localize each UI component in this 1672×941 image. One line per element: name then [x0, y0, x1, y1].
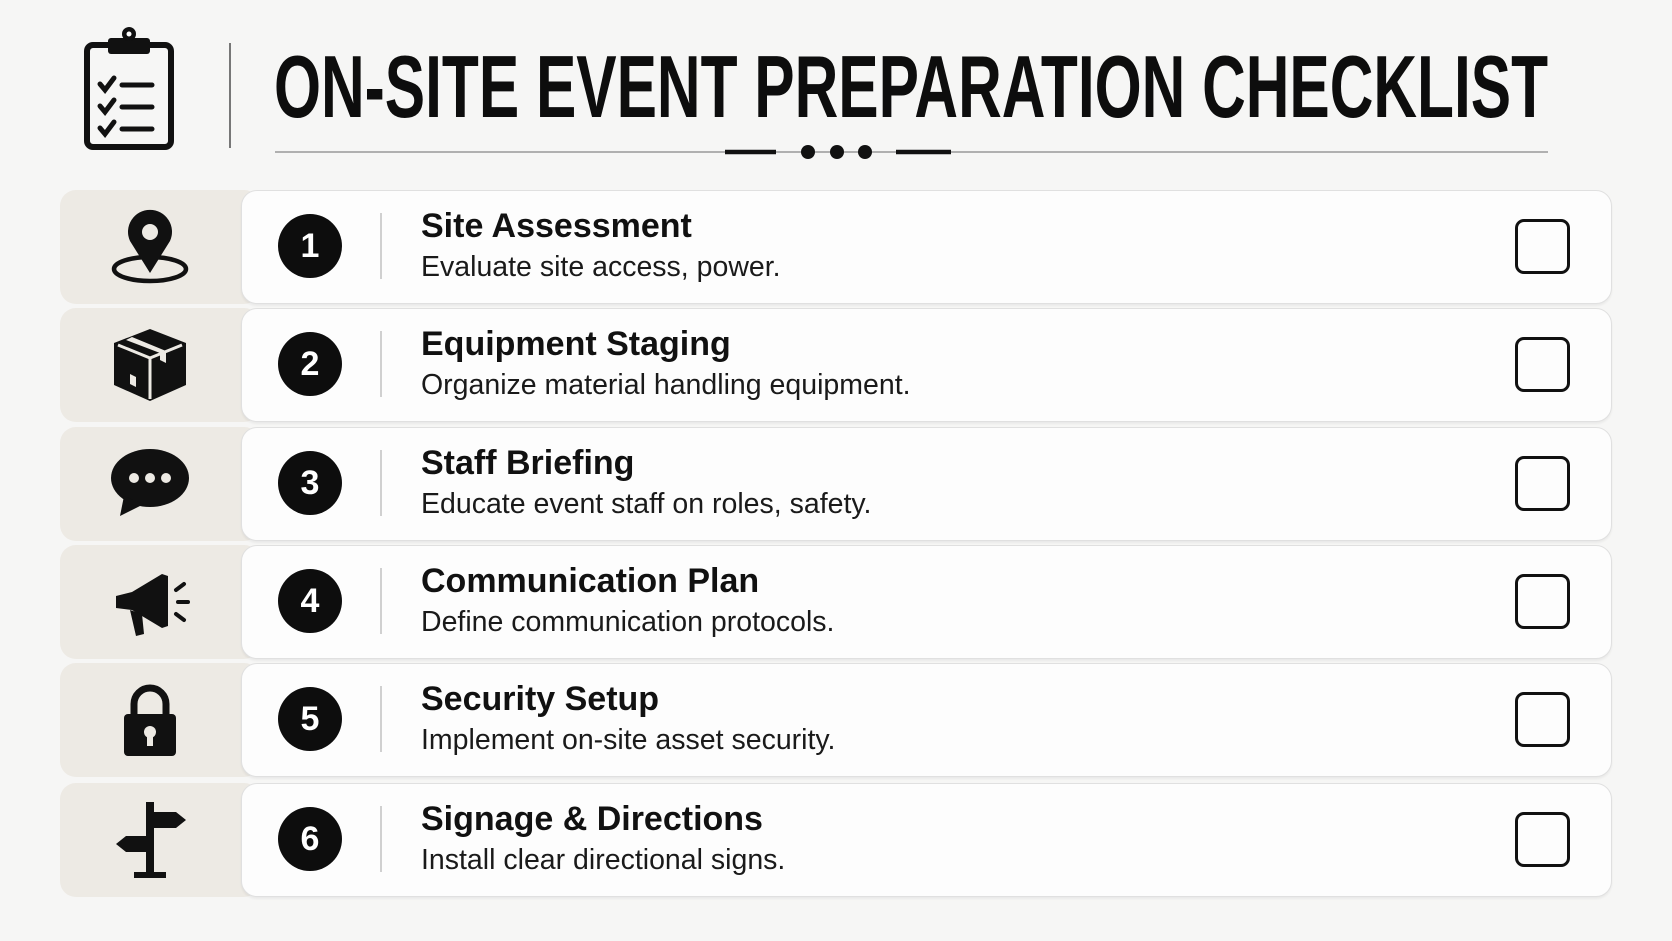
- icon: location pin: [112, 210, 188, 284]
- text: security setup: [421, 680, 835, 756]
- icon: box: [114, 329, 186, 401]
- icon: padlock: [124, 684, 176, 756]
- icon: speech bubble: [111, 449, 189, 516]
- vertical divider: [229, 43, 231, 148]
- number badge 1: 1: [301, 227, 319, 265]
- number badge 3: [278, 451, 342, 515]
- row 5: security setup: [60, 663, 1612, 778]
- row 3: staff briefing: [60, 427, 1612, 542]
- number badge 5: 5: [301, 700, 319, 738]
- checkbox: [1515, 692, 1570, 747]
- row 2: equipment staging: [60, 308, 1612, 424]
- number badge 1: [278, 214, 342, 278]
- text: site assessment: Evaluate site access, power.: [421, 251, 781, 283]
- number badge 5: [278, 687, 342, 751]
- icon: megaphone: [116, 574, 190, 636]
- row 4: communication plan: [60, 545, 1612, 660]
- number badge 4: [278, 569, 342, 633]
- title underline ornament: [275, 145, 1548, 159]
- row 1: site assessment: [60, 190, 1612, 306]
- checkbox: [1515, 812, 1570, 867]
- text: security setup: Implement on-site asset security.: [421, 724, 835, 756]
- text: staff briefing: [421, 444, 871, 520]
- text: signage & directions: Install clear directional signs.: [421, 844, 785, 876]
- checkbox: [1515, 219, 1570, 274]
- icon: clipboard: [84, 27, 174, 150]
- number badge 2: [278, 332, 342, 396]
- text: communication plan: Define communication protocols.: [421, 606, 834, 638]
- text: communication plan: Communication Plan: [421, 562, 759, 600]
- number badge 3: 3: [301, 464, 319, 502]
- text: equipment staging: [421, 325, 911, 401]
- checkbox: [1515, 337, 1570, 392]
- text: security setup: Security Setup: [421, 680, 659, 718]
- checkbox: [1515, 574, 1570, 629]
- number badge 4: 4: [301, 582, 319, 620]
- text: equipment staging: Equipment Staging: [421, 325, 731, 363]
- text: communication plan: [421, 562, 834, 638]
- number badge 6: 6: [301, 820, 319, 858]
- icon: signpost: [116, 802, 186, 878]
- text: staff briefing: Staff Briefing: [421, 444, 634, 482]
- text: signage & directions: Signage & Directions: [421, 800, 763, 838]
- text: equipment staging: Organize material handling equipment.: [421, 369, 911, 401]
- number badge 2: 2: [301, 345, 319, 383]
- text: signage & directions: [421, 800, 785, 876]
- row 6: signage & directions: [60, 783, 1612, 898]
- checkbox: [1515, 456, 1570, 511]
- text: staff briefing: Educate event staff on roles, safety.: [421, 488, 871, 520]
- number badge 6: [278, 807, 342, 871]
- text: site assessment: Site Assessment: [421, 207, 692, 245]
- text: site assessment: [421, 207, 781, 283]
